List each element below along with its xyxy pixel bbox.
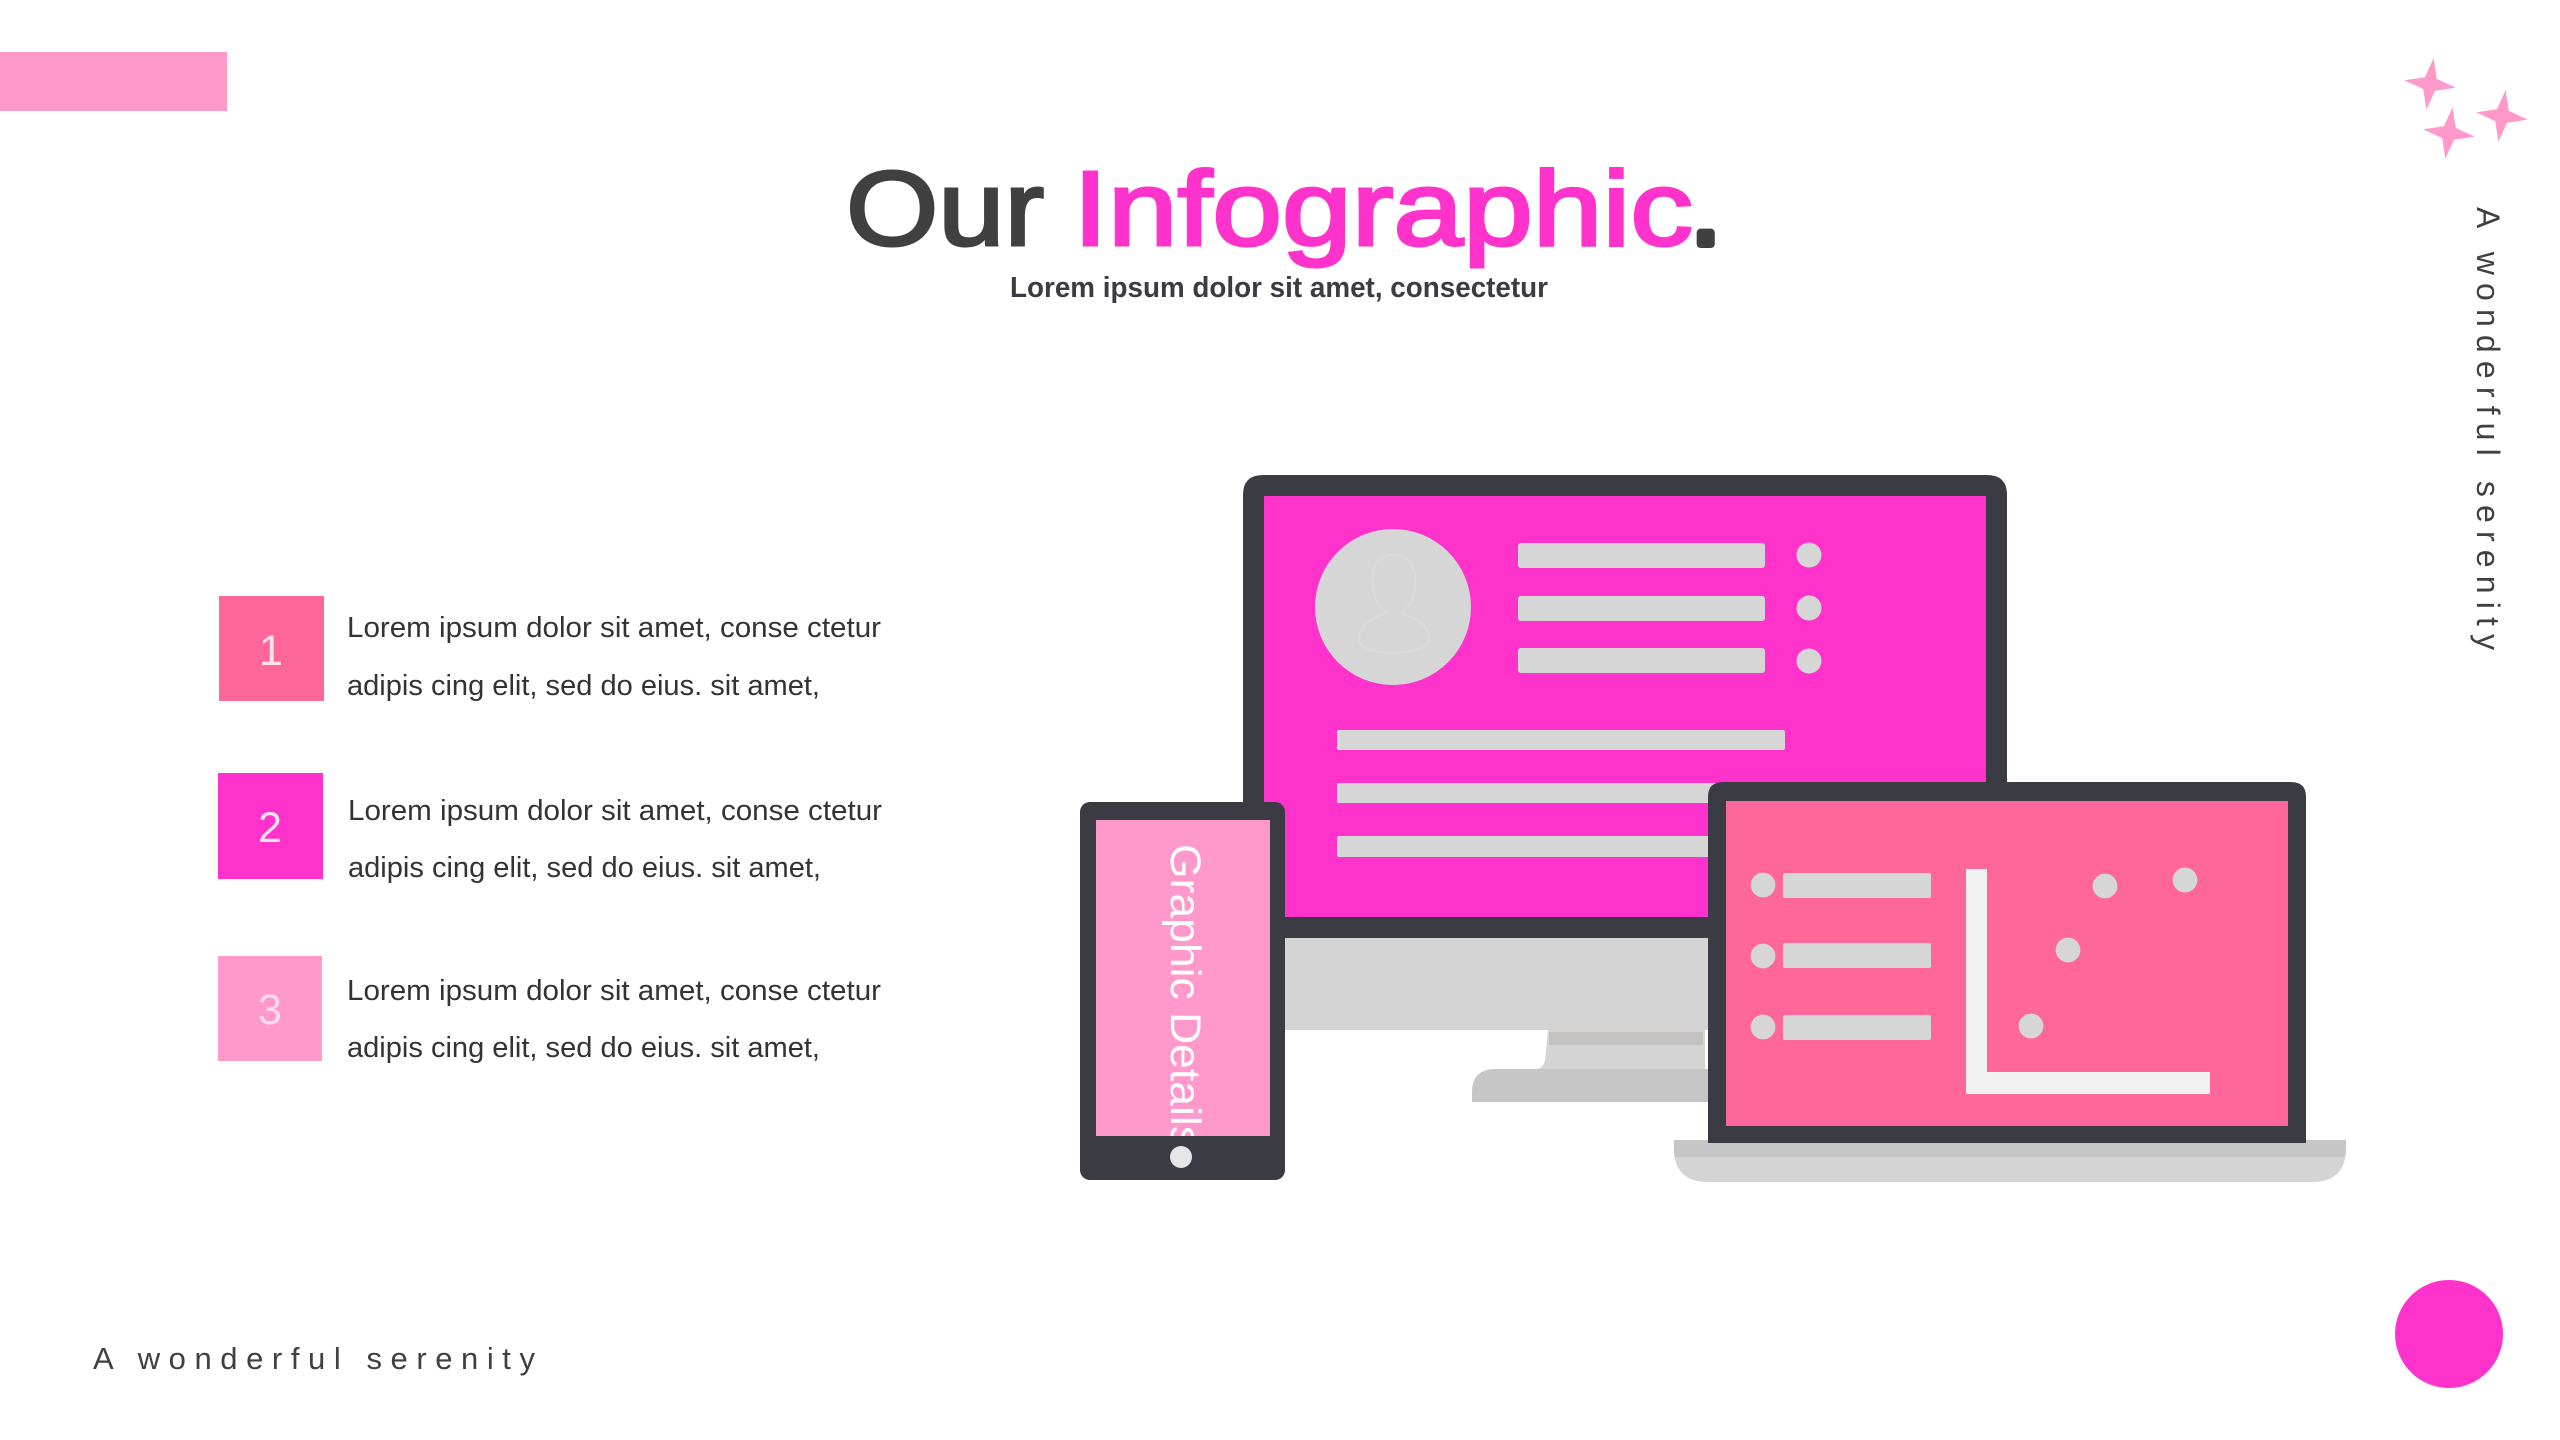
item 3: Lorem ipsum dolor sit amet, conse ctetur: [347, 975, 881, 1007]
laptop list rows: [1751, 873, 1931, 1040]
tablet button: [1170, 1146, 1192, 1168]
monitor chin: [1243, 930, 2007, 1030]
item 2: Lorem ipsum dolor sit amet, conse ctetur: [348, 795, 882, 827]
top-left accent bar: [0, 52, 227, 111]
monitor: [1243, 475, 2007, 1102]
item 3: 3: [258, 986, 282, 1034]
decorative circle: [2395, 1280, 2503, 1388]
monitor list rows: [1518, 542, 1822, 674]
laptop: [1674, 782, 2346, 1182]
title: Our: [846, 150, 1044, 268]
subtitle: Lorem ipsum dolor sit amet, consectetur: [1010, 272, 1548, 304]
device illustration: [1080, 475, 2346, 1182]
scatter chart: [1966, 868, 2210, 1094]
icon: sparkle stars: [2401, 55, 2531, 162]
laptop screen: [1726, 801, 2288, 1126]
tablet label: Graphic Details: [1161, 844, 1209, 1148]
item 1: [219, 596, 881, 702]
item 1: Lorem ipsum dolor sit amet, conse ctetur: [347, 612, 881, 644]
item 1: 1: [259, 627, 283, 675]
title: [846, 149, 1720, 268]
item 3: adipis cing elit, sed do eius. sit amet,: [347, 1032, 820, 1064]
footer tagline: A wonderful serenity: [93, 1341, 536, 1376]
monitor text lines: [1337, 730, 1785, 857]
title: .: [1691, 149, 1720, 267]
monitor screen: [1264, 496, 1986, 917]
tablet screen: [1096, 820, 1270, 1136]
list of three items: [218, 596, 882, 1064]
item 2: adipis cing elit, sed do eius. sit amet,: [348, 852, 821, 884]
item 1: adipis cing elit, sed do eius. sit amet,: [347, 670, 820, 702]
laptop base: [1674, 1140, 2346, 1182]
monitor frame: [1243, 475, 2007, 938]
item 2: [218, 773, 882, 884]
title: Infographic: [1073, 150, 1693, 268]
monitor stand: [1472, 1030, 1712, 1102]
laptop frame: [1708, 782, 2306, 1143]
item 2: 2: [258, 804, 282, 852]
tablet: [1080, 802, 1285, 1180]
avatar circle: [1315, 529, 1471, 685]
item 3: [218, 956, 881, 1064]
vertical tagline: A wonderful serenity: [2470, 207, 2506, 650]
tablet body: [1080, 802, 1285, 1180]
